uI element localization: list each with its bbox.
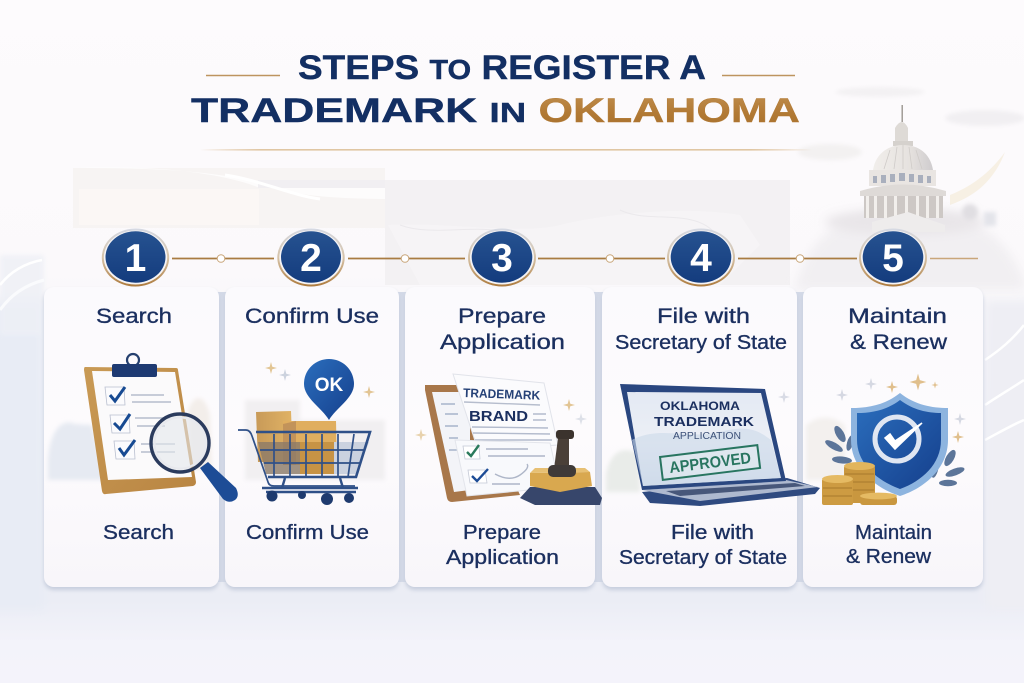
caption: File with bbox=[671, 522, 754, 544]
icon: laptop approved application bbox=[620, 384, 820, 506]
title line one: STEPS TO REGISTER A bbox=[298, 49, 706, 87]
icon: shield with check bbox=[851, 393, 948, 496]
caption: & Renew bbox=[846, 546, 932, 568]
sparkles bbox=[836, 374, 966, 443]
heading: Application bbox=[440, 331, 565, 354]
icon: laptop approved application: OKLAHOMA bbox=[660, 401, 740, 413]
icon: gavel on base bbox=[520, 430, 602, 505]
heading bbox=[848, 305, 948, 354]
step badge 3 bbox=[468, 228, 536, 286]
panel: step 1 search bbox=[44, 287, 238, 590]
icon: clipboard with trademark form bbox=[425, 374, 602, 505]
caption: Prepare bbox=[463, 522, 541, 544]
caption: Secretary of State bbox=[619, 547, 787, 569]
step badge 1: 1 bbox=[125, 237, 146, 280]
heading bbox=[440, 305, 565, 354]
icon: laptop approved application: TRADEMARK bbox=[654, 414, 755, 429]
icon: clipboard with trademark form: TRADEMARK bbox=[463, 386, 540, 403]
heading: Maintain bbox=[848, 305, 947, 328]
heading: Search bbox=[96, 305, 172, 328]
stamp: approved: APPROVED bbox=[668, 450, 752, 477]
icon: OK location pin bbox=[304, 359, 354, 420]
panel: step 5 maintain and renew bbox=[803, 287, 983, 590]
illustration backdrop bbox=[806, 418, 845, 480]
panel: step 2 confirm use bbox=[225, 287, 399, 590]
caption: Confirm Use bbox=[246, 522, 369, 544]
illustration backdrop bbox=[48, 422, 105, 480]
caption bbox=[619, 522, 787, 569]
icon: magnifying glass bbox=[151, 414, 238, 502]
caption: Maintain bbox=[855, 522, 932, 544]
caption bbox=[846, 522, 932, 568]
timeline connector bbox=[45, 255, 978, 262]
heading: & Renew bbox=[850, 331, 948, 354]
caption: Application bbox=[446, 547, 559, 569]
heading: File with bbox=[657, 305, 750, 328]
icon: OK location pin: OK bbox=[315, 375, 344, 396]
step badge 5: 5 bbox=[882, 237, 904, 280]
title bbox=[191, 49, 812, 151]
heading bbox=[615, 305, 787, 354]
illustration backdrop bbox=[606, 450, 640, 492]
capitol building bbox=[825, 105, 996, 235]
icon: clipboard with trademark form: BRAND bbox=[469, 408, 528, 425]
step badge 2 bbox=[277, 228, 345, 286]
step badge 5 bbox=[859, 228, 927, 286]
caption: Search bbox=[103, 522, 174, 544]
icon: laurel leaves bbox=[824, 424, 966, 486]
icon: clipboard with checklist bbox=[84, 354, 238, 502]
step badge 4: 4 bbox=[690, 237, 712, 280]
step badge 1 bbox=[102, 228, 169, 286]
panel: step 3 prepare application bbox=[405, 287, 602, 590]
step badge 3: 3 bbox=[491, 237, 513, 280]
step badge 4 bbox=[667, 228, 735, 286]
illustration backdrop bbox=[245, 400, 385, 480]
icon: gold coins bbox=[822, 462, 897, 505]
heading: Prepare bbox=[458, 305, 546, 328]
heading: Secretary of State bbox=[615, 332, 787, 354]
icon: laptop approved application: APPLICATION bbox=[673, 431, 741, 442]
heading: Confirm Use bbox=[245, 305, 379, 328]
panel: step 4 file with secretary of state bbox=[602, 287, 820, 590]
caption bbox=[446, 522, 559, 569]
step badge 2: 2 bbox=[300, 237, 322, 280]
icon: shopping cart with boxes bbox=[238, 359, 370, 505]
title line two: TRADEMARK IN OKLAHOMA bbox=[191, 92, 800, 130]
